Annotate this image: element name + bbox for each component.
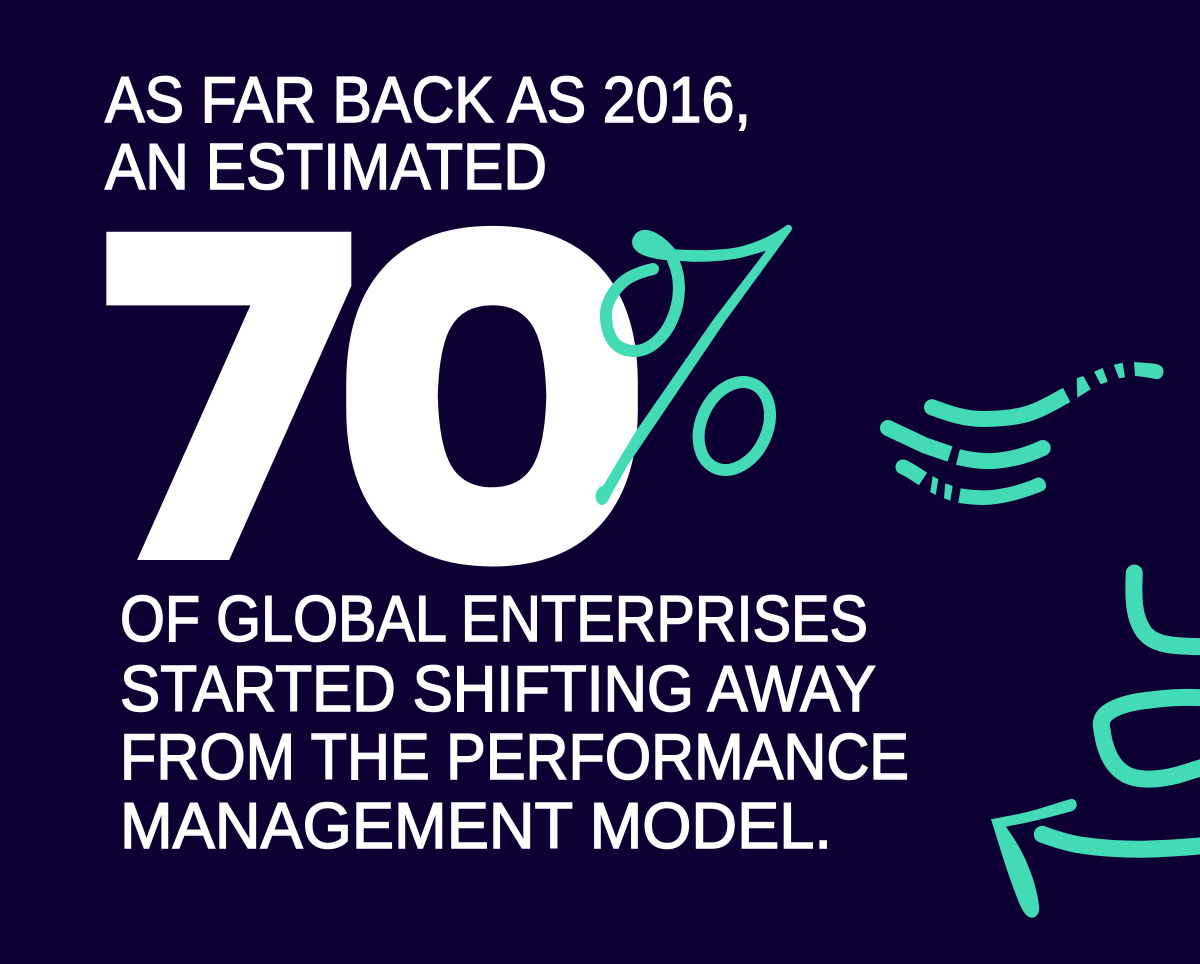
body text: enterprise statistic	[120, 582, 909, 862]
body text: enterprise statistic: MANAGEMENT MODEL.	[120, 789, 832, 862]
big number: 70: 7	[85, 154, 378, 655]
body text: enterprise statistic: STARTED SHIFTING AWAY	[120, 652, 876, 725]
big number: 70	[85, 154, 661, 655]
heading: intro text: AS FAR BACK AS 2016,	[105, 63, 751, 136]
heading: intro text	[105, 63, 751, 203]
heading: intro text: AN ESTIMATED	[105, 130, 547, 203]
decoration: large arrow curl	[991, 573, 1200, 918]
big number: 70: 0	[323, 161, 661, 646]
arrow head	[991, 799, 1077, 918]
decoration: dashed flourish lines	[880, 362, 1164, 505]
body text: enterprise statistic: OF GLOBAL ENTERPRISES	[120, 582, 868, 655]
body text: enterprise statistic: FROM THE PERFORMANCE	[120, 720, 909, 793]
icon: hand-drawn percent sign	[596, 225, 792, 505]
